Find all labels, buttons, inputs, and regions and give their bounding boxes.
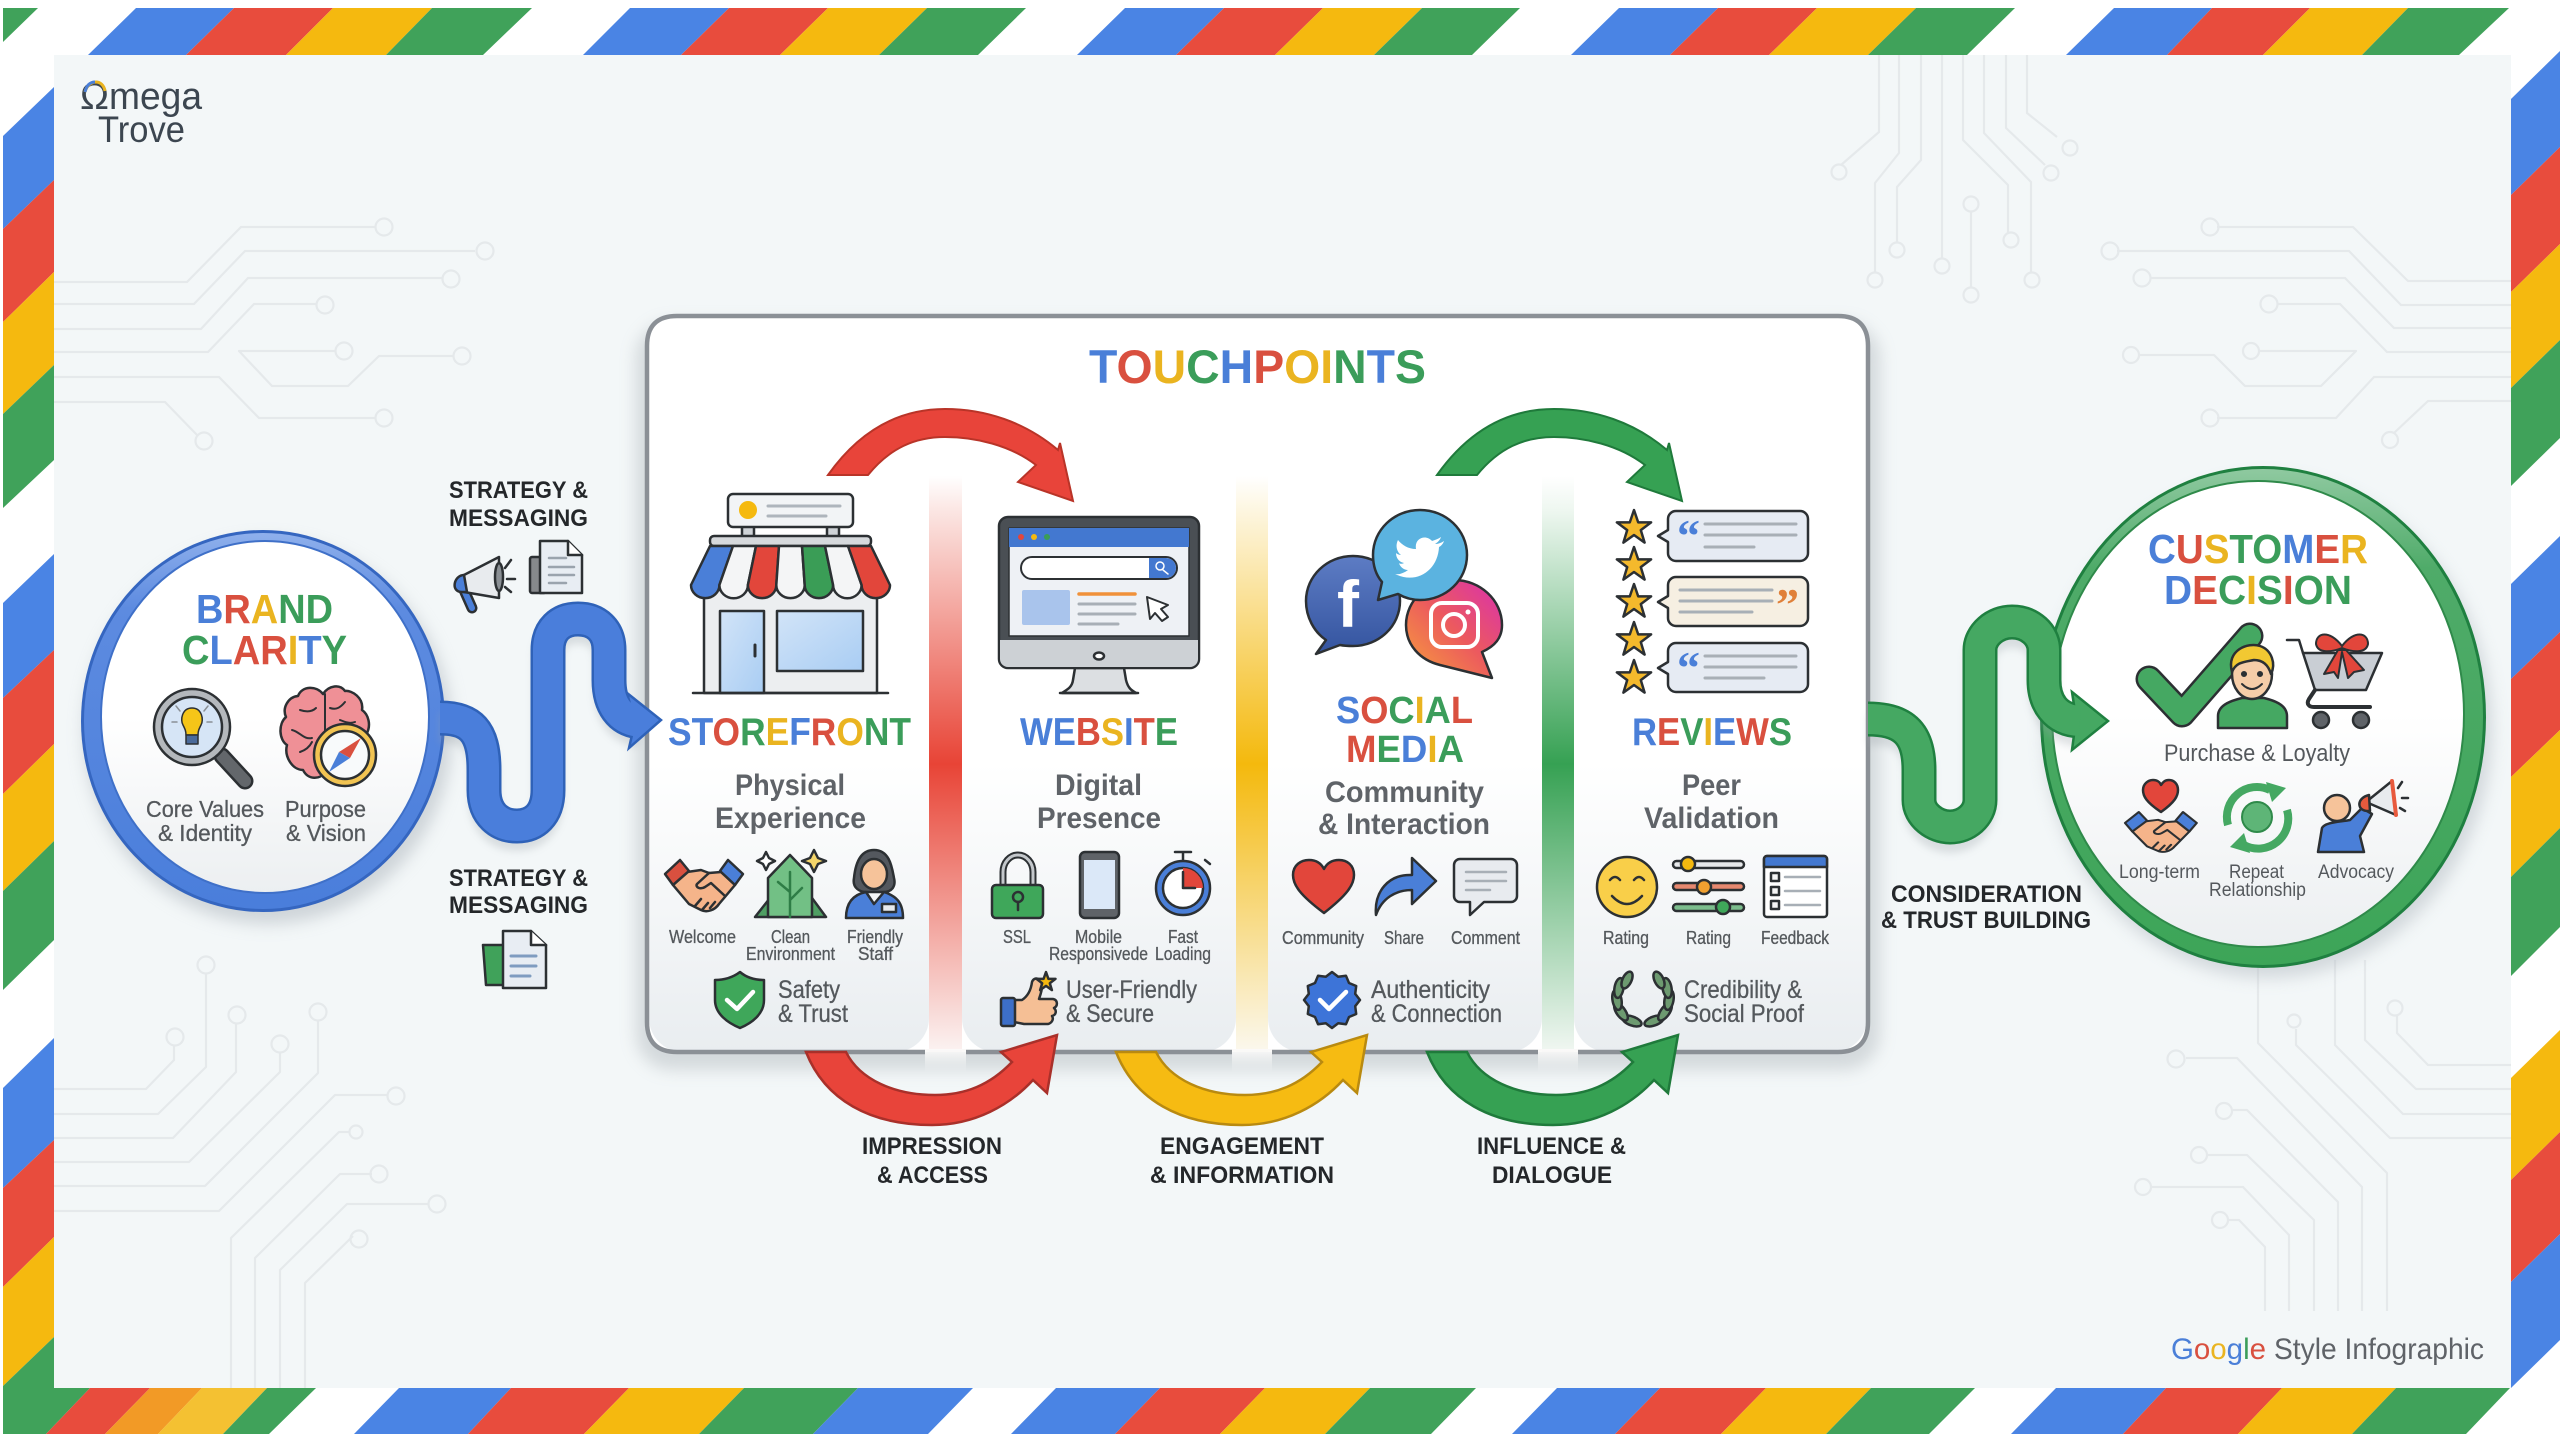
icon: clean environment	[755, 850, 826, 917]
label: feedback: Feedback	[1761, 928, 1830, 948]
arrow: yellow arc bottom	[1116, 1035, 1367, 1125]
column: website	[992, 517, 1211, 1028]
label: repeat relationship: Relationship	[2209, 880, 2306, 901]
label: safety and trust: Safety	[778, 976, 840, 1004]
label: friendly staff	[847, 927, 903, 964]
heading: brand clarity: BRAND	[196, 586, 333, 632]
heading: social media: SOCIAL	[1336, 690, 1473, 732]
heading: brand clarity	[182, 586, 347, 673]
label: safety and trust: & Trust	[778, 1000, 848, 1028]
label: clean environment: Clean	[771, 927, 810, 947]
logo: Omega Trove: mega	[109, 76, 203, 118]
label: fast loading	[1155, 927, 1211, 964]
icon: lock	[992, 855, 1043, 918]
icon: repeat cycle	[2227, 782, 2288, 853]
label: impression and access	[862, 1133, 1002, 1189]
label: core values	[146, 796, 264, 846]
icon: comment bubble	[1454, 859, 1517, 915]
right striped border	[2511, 51, 2560, 1388]
panel: brand clarity	[81, 530, 452, 924]
label: friendly staff: Friendly	[847, 927, 903, 947]
label: fast loading: Loading	[1155, 944, 1211, 964]
heading: reviews: REVIEWS	[1632, 711, 1792, 754]
icon: storefront	[691, 494, 890, 693]
icon: document green	[483, 931, 546, 988]
subheading: digital presence: Digital	[1055, 769, 1142, 802]
icon: share arrow	[1376, 858, 1436, 915]
card: storefront	[649, 475, 929, 1052]
label: impression and access: & ACCESS	[877, 1162, 988, 1189]
icon: rating sliders	[1673, 857, 1744, 914]
top striped border	[3, 8, 2509, 55]
subheading: digital presence: Presence	[1037, 802, 1161, 835]
icon: magnifier with bulb	[154, 689, 245, 781]
label: purpose: & Vision	[286, 820, 366, 846]
subheading: physical experience	[715, 769, 866, 835]
icon: smiley	[1597, 857, 1657, 917]
label: strategy and messaging top: STRATEGY &	[449, 477, 588, 504]
label: consideration and trust building: & TRUST BUILDING	[1881, 907, 2091, 934]
icon: handshake welcome	[665, 860, 743, 911]
label: comment: Comment	[1451, 928, 1520, 948]
heading: brand clarity: CLARITY	[182, 627, 347, 673]
label: strategy and messaging top	[449, 477, 588, 532]
subheading: community and interaction: Community	[1325, 776, 1484, 809]
icon: shield	[715, 972, 764, 1028]
title: touchpoints: TOUCHPOINTS	[1089, 340, 1426, 393]
label: community: Community	[1282, 928, 1364, 948]
label: ssl: SSL	[1003, 927, 1031, 947]
label: purpose	[285, 796, 366, 846]
heading: social media	[1336, 690, 1473, 771]
label: purchase and loyalty: Purchase & Loyalty	[2164, 740, 2350, 767]
arrow: green serpentine	[1868, 622, 2108, 838]
label: advocacy: Advocacy	[2318, 862, 2394, 883]
icon: social bubbles	[1306, 510, 1502, 678]
label: rating: Rating	[1603, 928, 1649, 948]
icon: brain with compass	[280, 686, 376, 786]
label: core values: Core Values	[146, 796, 264, 822]
icon: shopping cart with bow	[2287, 634, 2382, 728]
subheading: peer validation: Peer	[1682, 769, 1741, 802]
icon: verified badge	[1304, 972, 1360, 1028]
logo: Omega Trove	[80, 76, 203, 150]
label: influence and dialogue	[1477, 1133, 1626, 1189]
heading: customer decision: CUSTOMER	[2148, 526, 2368, 572]
icon: review bubbles	[1658, 510, 1808, 693]
footer: google style infographic: Style Infographic	[2274, 1333, 2484, 1366]
icon: thumbs up with star	[1001, 972, 1057, 1026]
label: friendly staff: Staff	[858, 944, 894, 964]
card: website	[962, 475, 1236, 1052]
icon: customer person	[2218, 645, 2287, 728]
icon: document	[530, 541, 582, 593]
label: mobile responsive	[1049, 927, 1148, 964]
label: mobile responsive: Mobile	[1075, 927, 1122, 947]
icon: heart	[1293, 860, 1354, 913]
arrow: blue serpentine	[440, 619, 661, 836]
bottom striped border	[3, 1337, 2510, 1434]
label: strategy and messaging bottom	[449, 865, 588, 919]
icon: phone	[1080, 852, 1119, 918]
label: user-friendly and secure	[1066, 976, 1197, 1028]
label: engagement and information: ENGAGEMENT	[1160, 1133, 1324, 1160]
label: engagement and information: & INFORMATION	[1150, 1162, 1334, 1189]
label: credibility and social proof	[1684, 976, 1804, 1028]
label: influence and dialogue: DIALOGUE	[1492, 1162, 1612, 1189]
icon: advocate with megaphone	[2318, 781, 2408, 852]
logo: Omega Trove: Trove	[98, 109, 185, 150]
connector: green vertical	[1542, 476, 1574, 1052]
icon: star rating column	[1617, 510, 1651, 693]
label: user-friendly and secure: User-Friendly	[1066, 976, 1197, 1004]
heading: website: WEBSITE	[1020, 711, 1178, 754]
label: mobile responsive: Responsivede	[1049, 944, 1148, 964]
label: user-friendly and secure: & Secure	[1066, 1000, 1154, 1028]
footer: google style infographic	[2171, 1333, 2484, 1366]
icon: laurel wreath	[1611, 970, 1675, 1029]
icon: social bubbles: f	[1337, 567, 1360, 641]
icon: handshake with heart	[2125, 780, 2197, 852]
label: strategy and messaging bottom: STRATEGY &	[449, 865, 588, 892]
subheading: peer validation	[1644, 769, 1779, 835]
label: influence and dialogue: INFLUENCE &	[1477, 1133, 1626, 1160]
panel: customer decision	[2040, 466, 2492, 978]
label: credibility and social proof: Credibility &	[1684, 976, 1802, 1004]
arrow: green arc bottom	[1427, 1035, 1678, 1125]
label: authenticity and connection: & Connection	[1371, 1000, 1502, 1028]
label: clean environment	[746, 927, 835, 964]
subheading: physical experience: Physical	[735, 769, 845, 802]
column: reviews	[1597, 510, 1830, 1029]
icon: friendly staff	[846, 850, 903, 918]
subheading: peer validation: Validation	[1644, 802, 1779, 835]
heading: customer decision	[2148, 526, 2368, 613]
icon: review bubbles: “	[1677, 510, 1700, 561]
label: repeat relationship	[2209, 862, 2306, 901]
label: welcome: Welcome	[669, 927, 736, 947]
connector: yellow vertical	[1236, 476, 1268, 1052]
label: consideration and trust building	[1881, 881, 2091, 934]
footer: google style infographic: Google	[2171, 1333, 2266, 1366]
subheading: community and interaction	[1318, 776, 1490, 841]
label: impression and access: IMPRESSION	[862, 1133, 1002, 1160]
arrow: green arc top	[1437, 409, 1682, 501]
label: engagement and information	[1150, 1133, 1334, 1189]
label: strategy and messaging top: MESSAGING	[449, 505, 588, 532]
label: clean environment: Environment	[746, 944, 835, 964]
logo: Omega Trove: Ω	[80, 76, 109, 118]
icon: check mark	[2149, 636, 2250, 714]
subheading: digital presence	[1037, 769, 1161, 835]
label: fast loading: Fast	[1168, 927, 1198, 947]
column: social media	[1282, 510, 1520, 1028]
label: rating second: Rating	[1686, 928, 1731, 948]
icon: megaphone	[455, 557, 515, 608]
icon: monitor	[999, 517, 1199, 693]
heading: customer decision: DECISION	[2164, 567, 2352, 613]
panel: touchpoints container	[636, 316, 1880, 1073]
card: social media	[1268, 475, 1542, 1052]
heading: social media: MEDIA	[1346, 729, 1464, 771]
label: core values: & Identity	[158, 820, 252, 846]
label: credibility and social proof: Social Proof	[1684, 1000, 1804, 1028]
card: reviews	[1574, 475, 1867, 1052]
label: safety and trust	[778, 976, 848, 1028]
label: long-term: Long-term	[2119, 862, 2200, 883]
arrow: red arc top	[828, 409, 1073, 501]
label: authenticity and connection: Authenticity	[1371, 976, 1490, 1004]
left striped border	[3, 87, 54, 1386]
arrow: red arc bottom	[806, 1035, 1057, 1125]
connector: red vertical	[929, 476, 962, 1052]
icon: feedback form	[1764, 856, 1827, 917]
icon: review bubbles: ”	[1776, 579, 1799, 630]
label: repeat relationship: Repeat	[2229, 862, 2285, 883]
icon: stopwatch	[1156, 852, 1210, 915]
column: storefront	[665, 494, 911, 1028]
label: strategy and messaging bottom: MESSAGING	[449, 892, 588, 919]
label: consideration and trust building: CONSIDERATION	[1891, 881, 2082, 908]
label: purpose: Purpose	[285, 796, 366, 822]
subheading: physical experience: Experience	[715, 802, 866, 835]
label: authenticity and connection	[1371, 976, 1502, 1028]
heading: storefront: STOREFRONT	[668, 711, 911, 754]
label: share: Share	[1384, 928, 1424, 948]
icon: review bubbles: “	[1677, 642, 1700, 693]
subheading: community and interaction: & Interaction	[1318, 808, 1490, 841]
